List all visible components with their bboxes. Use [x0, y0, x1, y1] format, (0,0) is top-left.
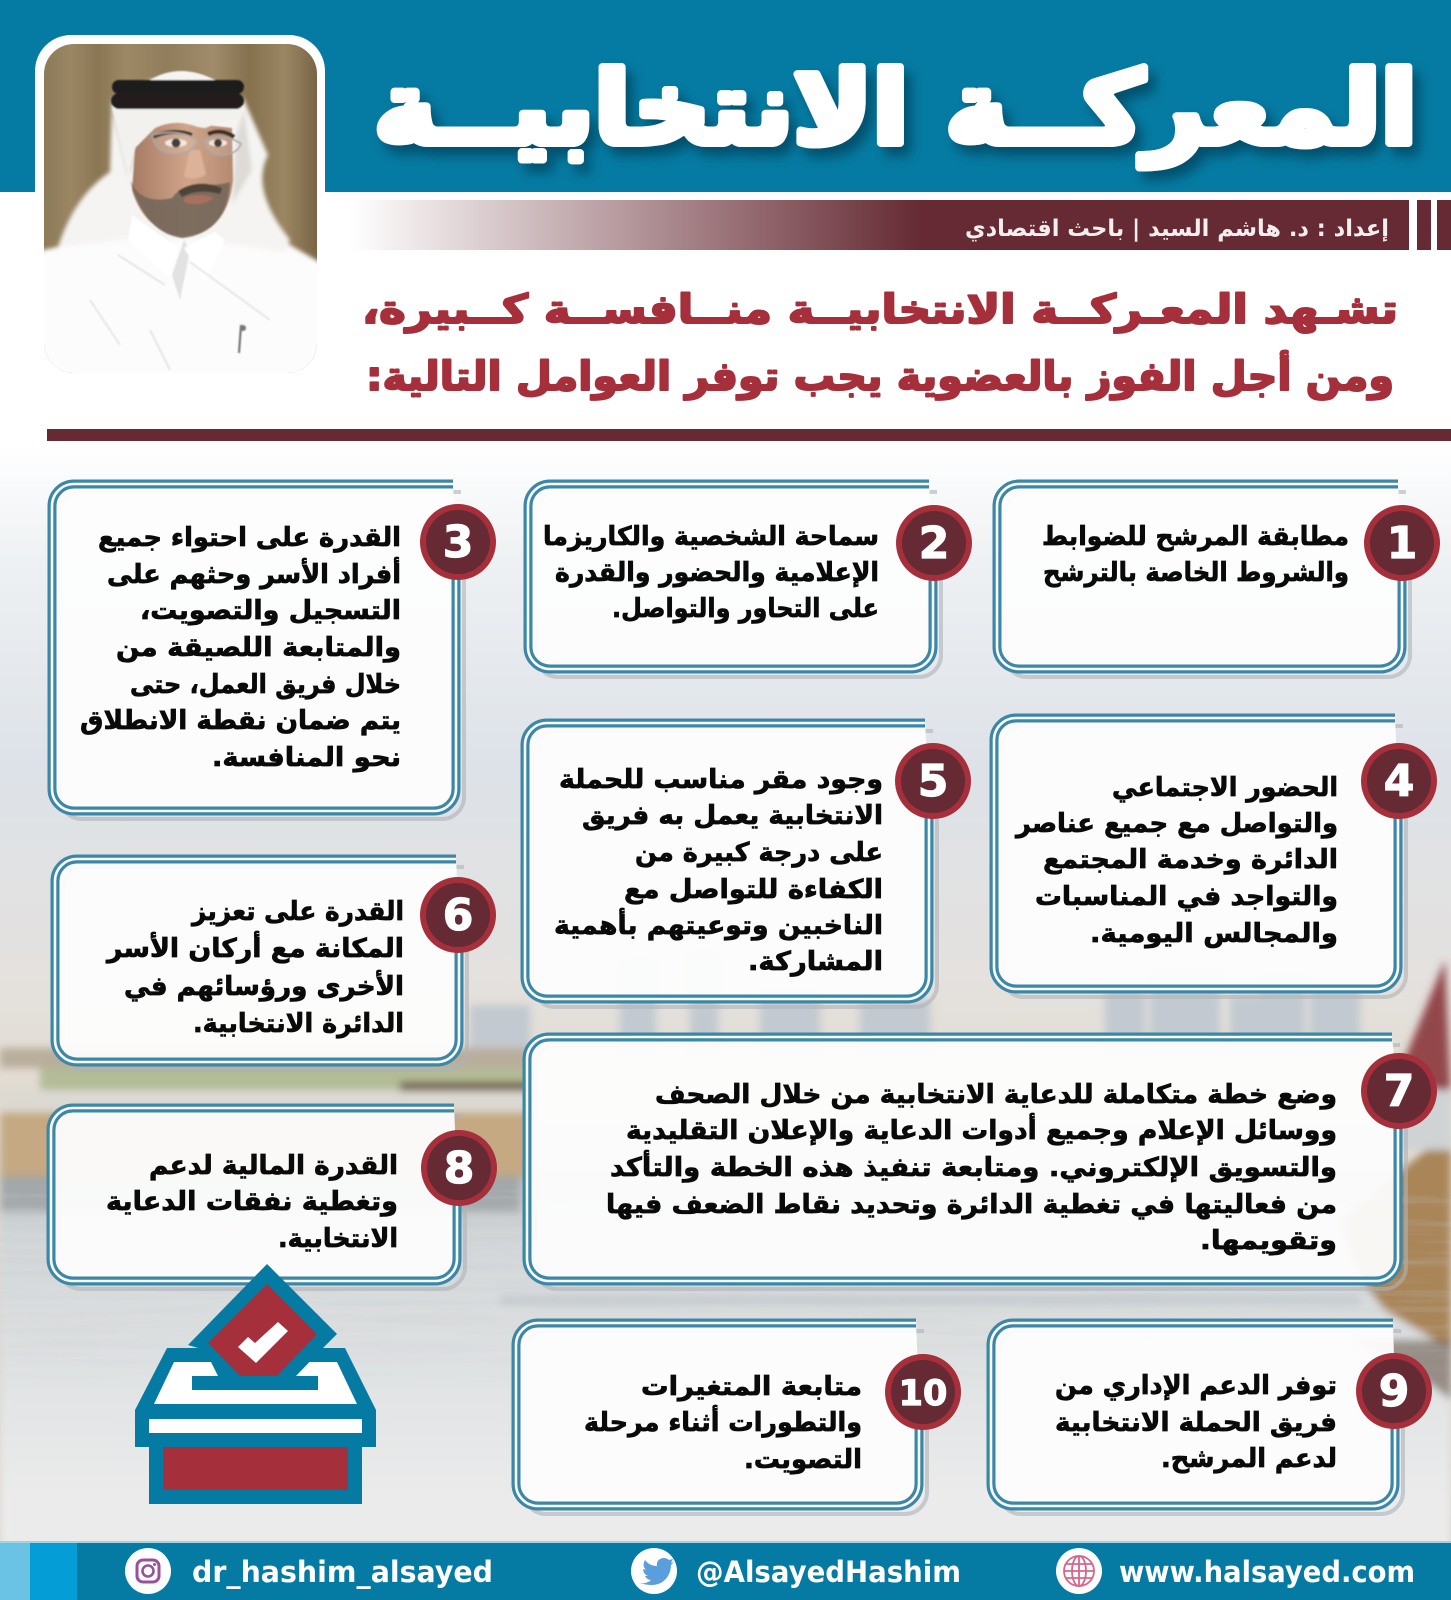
icon: ballot box [135, 1264, 376, 1504]
card 3 text [80, 523, 401, 773]
card 2 text: الإعلامية والحضور والقدرة [555, 558, 879, 588]
card 4 text: الدائرة وخدمة المجتمع [1043, 845, 1338, 875]
panel: card 10 [516, 1323, 961, 1514]
badge 3: 3 [443, 517, 473, 568]
badge 7: 7 [1384, 1066, 1414, 1117]
divider rule [47, 429, 1451, 441]
panel: card 6 [55, 859, 496, 1070]
card 3 text: التسجيل والتصويت، [140, 596, 401, 626]
card 3 text: يتم ضمان نقطة الانطلاق [80, 706, 401, 736]
card 10 text: متابعة المتغيرات [641, 1372, 862, 1402]
card 2 text [543, 522, 879, 624]
card 4 text: والمجالس اليومية. [1090, 919, 1338, 949]
right dhow hull and flag [1340, 1130, 1451, 1350]
card 3 text: أفراد الأسر وحثهم على [107, 557, 401, 590]
card 1 text: مطابقة المرشح للضوابط [1042, 522, 1349, 552]
badge 1: 1 [1387, 518, 1417, 569]
card 5 text: على درجة كبيرة من [635, 838, 883, 868]
subtitle: تشـهد المعـركــة الانتخابيــة منــافســة كــبيرة، [362, 287, 1398, 333]
badge 4: 4 [1384, 756, 1414, 807]
badge 2 [896, 505, 972, 581]
card 5 text: الانتخابية يعمل به فريق [582, 801, 883, 831]
header band [0, 0, 1451, 192]
author bar: إعداد : د. هاشم السيد | باحث اقتصادي [965, 216, 1389, 242]
card 9 text [1055, 1371, 1337, 1474]
card 7 text: والتسويق الإلكتروني. ومتابعة تنفيذ هذه الخطة والتأكد [610, 1150, 1337, 1183]
card 7 text [606, 1080, 1337, 1256]
portrait photo [30, 35, 330, 390]
badge 10: 10 [899, 1374, 947, 1414]
card 5 text [554, 765, 883, 977]
card 4 text: والتواصل مع جميع عناصر [1014, 809, 1338, 839]
panel: card 1 [997, 484, 1440, 677]
badge 1 [1364, 505, 1440, 581]
panel: card 4 [994, 718, 1437, 997]
instagram handle: dr_hashim_alsayed [192, 1555, 493, 1589]
title: المعركــة الانتخابيــة [374, 50, 1417, 168]
icon: instagram [125, 1548, 171, 1594]
background: harbour scene [0, 445, 1451, 1600]
icon: globe [1056, 1548, 1102, 1594]
card 5 text: الناخبين وتوعيتهم بأهمية [554, 908, 883, 941]
card 6 text: القدرة على تعزيز [190, 897, 404, 927]
panel: card 3 [52, 484, 496, 819]
badge 9 [1356, 1353, 1432, 1429]
badge 5: 5 [918, 756, 948, 807]
card 3 text: نحو المنافسة. [212, 743, 401, 773]
card 2 text: سماحة الشخصية والكاريزما [543, 522, 879, 552]
badge 2: 2 [919, 518, 949, 569]
badge 5 [895, 743, 971, 819]
twitter handle: @AlsayedHashim [696, 1555, 961, 1589]
card 8 text [106, 1151, 398, 1254]
left dhow and quay [0, 1048, 530, 1068]
card 4 text: الحضور الاجتماعي [1112, 773, 1338, 803]
badge 8: 8 [444, 1143, 474, 1194]
card 9 text: توفر الدعم الإداري من [1055, 1371, 1337, 1401]
card 7 text: وضع خطة متكاملة للدعاية الانتخابية من خلال الصحف [655, 1080, 1337, 1110]
badge 8 [421, 1130, 497, 1206]
card 3 text: القدرة على احتواء جميع [98, 523, 401, 553]
card 9 text: لدعم المرشح. [1161, 1444, 1337, 1474]
card 4 text: والتواجد في المناسبات [1035, 882, 1338, 912]
subtitle [362, 287, 1398, 400]
badge 6 [420, 877, 496, 953]
card 9 text: فريق الحملة الانتخابية [1055, 1408, 1337, 1438]
card 1 text: والشروط الخاصة بالترشح [1043, 558, 1349, 588]
badge 4 [1361, 743, 1437, 819]
card 7 text: وتقويمها. [1200, 1226, 1337, 1256]
footer bar [0, 1541, 1451, 1600]
author bar [350, 200, 1451, 250]
card 2 text: على التحاور والتواصل. [612, 594, 879, 624]
website: www.halsayed.com [1119, 1555, 1415, 1589]
panel: card 8 [51, 1108, 497, 1289]
card 8 text: الانتخابية. [278, 1224, 398, 1254]
panel: card 9 [991, 1323, 1432, 1514]
card 5 text: وجود مقر مناسب للحملة [559, 765, 883, 795]
card 4 text [1014, 773, 1338, 949]
skyline silhouette [470, 950, 1360, 1055]
card 3 text: خلال فريق العمل، حتى [130, 670, 401, 700]
card 6 text: الأخرى ورؤسائهم في [124, 970, 404, 1002]
card 6 text: المكانة مع أركان الأسر [105, 931, 404, 964]
card 6 text [105, 897, 404, 1039]
subtitle: ومن أجل الفوز بالعضوية يجب توفر العوامل التالية: [366, 350, 1394, 400]
icon: twitter [631, 1548, 677, 1594]
card 7 text: ووسائل الإعلام وجميع أدوات الدعاية والإعلان التقليدية [626, 1113, 1337, 1146]
panel: card 5 [525, 723, 971, 1007]
card 8 text: وتغطية نفقات الدعاية [106, 1187, 398, 1217]
panel: card 7 [527, 1037, 1437, 1289]
card 5 text: المشاركة. [748, 947, 883, 977]
card 6 text: الدائرة الانتخابية. [193, 1009, 404, 1039]
badge 7 [1361, 1053, 1437, 1129]
panel: card 2 [528, 484, 972, 677]
card 7 text: من فعاليتها في تغطية الدائرة وتحديد نقاط الضعف فيها [606, 1190, 1337, 1220]
badge 10 [885, 1354, 961, 1430]
card 10 text: والتطورات أثناء مرحلة [584, 1405, 862, 1438]
card 5 text: الكفاءة للتواصل مع [624, 875, 883, 905]
card 10 text [584, 1372, 862, 1475]
card 10 text: التصويت. [744, 1445, 862, 1475]
card 3 text: والمتابعة اللصيقة من [116, 633, 401, 663]
card 8 text: القدرة المالية لدعم [149, 1151, 398, 1181]
badge 9: 9 [1379, 1366, 1409, 1417]
badge 3 [420, 504, 496, 580]
badge 6: 6 [443, 890, 473, 941]
card 1 text [1042, 522, 1349, 588]
